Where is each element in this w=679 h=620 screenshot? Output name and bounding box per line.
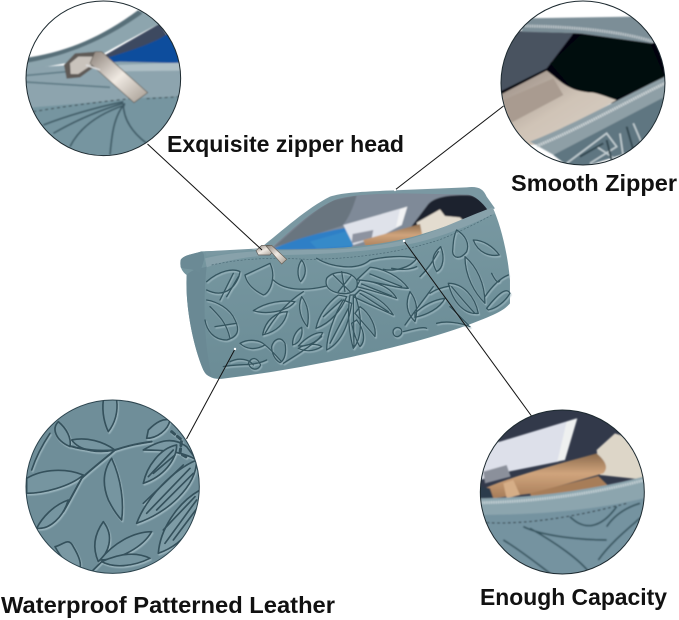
- zipper puller: [256, 245, 287, 264]
- leather pattern detail image: [27, 400, 200, 572]
- capacity detail image: [477, 418, 650, 580]
- pouch top rim: [205, 187, 495, 256]
- embossed floral pattern: [205, 230, 510, 369]
- side panel shading: [186, 267, 212, 377]
- stitching: [212, 215, 492, 265]
- pouch body: [180, 207, 510, 379]
- panel: waterproof patterned leather: [26, 400, 200, 573]
- panel: smooth zipper: [497, 1, 673, 170]
- zipper head detail image: [26, 10, 180, 156]
- anchor dots: [234, 189, 405, 350]
- product: pouch: [180, 187, 510, 379]
- line: smooth zipper: [395, 106, 504, 190]
- line: zipper head: [148, 144, 262, 250]
- leader lines: [148, 106, 532, 439]
- line: capacity: [404, 241, 532, 416]
- smooth zipper detail image: [502, 16, 664, 164]
- label: exquisite zipper head: Exquisite zipper head: [167, 131, 404, 157]
- panel: enough capacity: [477, 410, 650, 580]
- side tab: [181, 251, 204, 273]
- label: enough capacity: Enough Capacity: [480, 584, 667, 610]
- panel: exquisite zipper head: [20, 1, 187, 160]
- pouch interior: [270, 189, 490, 252]
- label: waterproof patterned leather: Waterproof Patterned Leather: [1, 592, 335, 618]
- line: leather: [186, 349, 235, 439]
- label: smooth zipper: Smooth Zipper: [511, 170, 677, 196]
- zipper band: [205, 207, 495, 267]
